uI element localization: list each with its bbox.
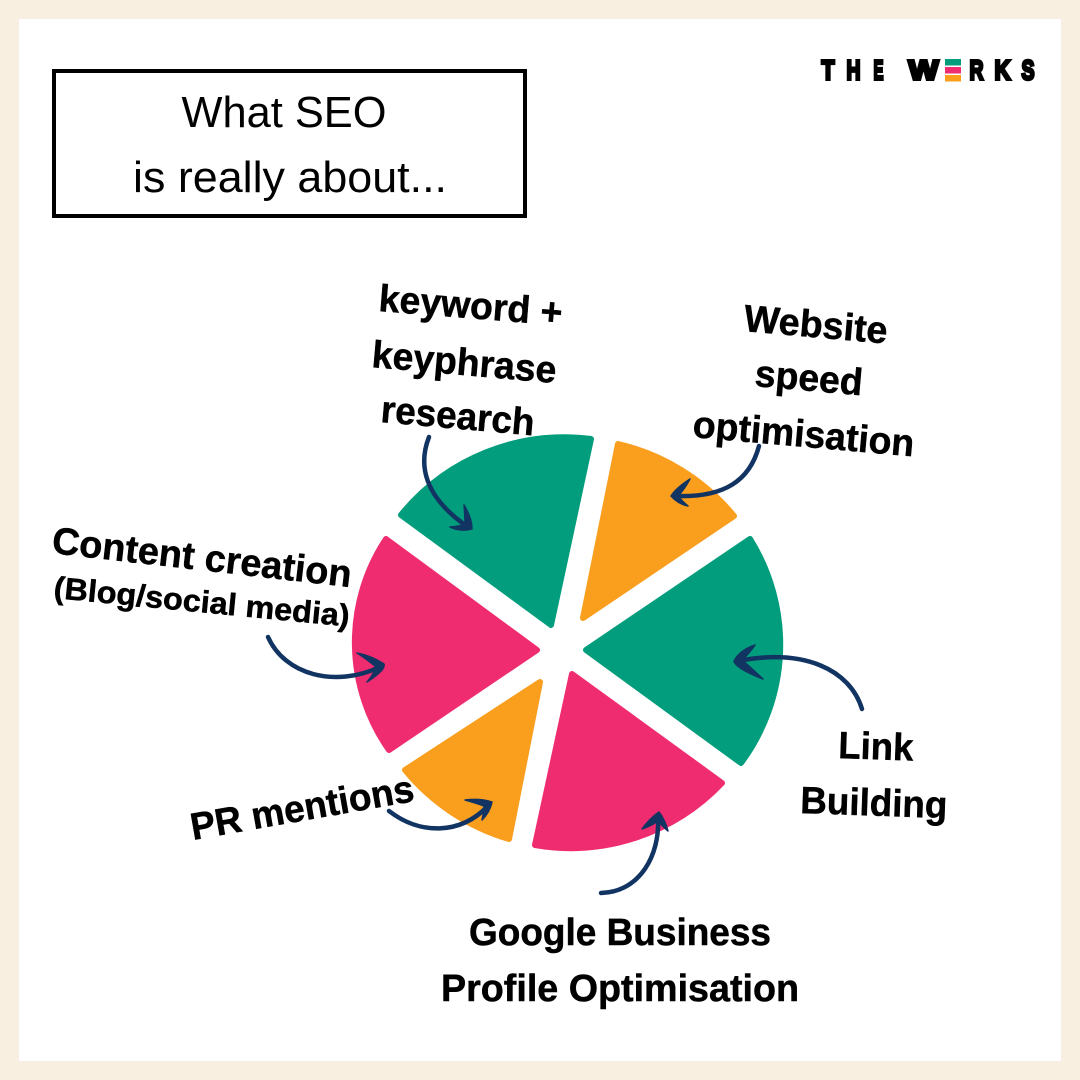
title box: is really about... [133, 153, 447, 202]
label: website speed optimisation: optimisation [691, 404, 916, 465]
slice: Google Business Profile [535, 674, 722, 848]
logo: The Werks: K [994, 54, 1010, 86]
logo: The Werks: E [874, 54, 884, 86]
logo: The Werks: S [1022, 54, 1034, 86]
label: PR mentions: PR mentions [187, 768, 417, 849]
label: website speed optimisation: Website [742, 298, 889, 353]
slice: website speed [583, 444, 734, 618]
slice: PR mentions [405, 682, 540, 839]
logo: The Werks [822, 54, 1034, 86]
arrow: to link building slice [734, 645, 862, 709]
arrow: to keyword slice [424, 437, 472, 530]
label: content creation: Content creation [50, 520, 354, 596]
logo: The Werks: R [970, 54, 984, 86]
label: website speed optimisation [691, 298, 916, 465]
label: Google Business Profile Optimisation: Google Business [469, 912, 771, 954]
slice: keyword research [401, 437, 591, 625]
slice: link building [586, 539, 780, 763]
label: content creation: (Blog/social media) [52, 570, 351, 633]
label: Google Business Profile Optimisation: Profile Optimisation [441, 968, 799, 1010]
label: keyword + keyphrase research: keyword + [377, 278, 564, 334]
label: content creation [50, 520, 354, 633]
label: website speed optimisation: speed [753, 353, 864, 404]
label: link building [800, 725, 948, 827]
logo: The Werks: H [846, 54, 860, 86]
pie chart [355, 437, 780, 848]
arrow: to Google Business slice [601, 812, 668, 893]
label: link building: Link [838, 725, 915, 770]
arrow: to PR slice [389, 799, 492, 828]
arrow: to content slice [268, 637, 384, 682]
arrow: to website speed slice [671, 446, 759, 506]
label: keyword + keyphrase research [370, 278, 564, 444]
logo: The Werks: W [908, 54, 939, 86]
title box: What SEO [182, 88, 386, 137]
slice: content creation [355, 539, 537, 750]
label: link building: Building [800, 780, 948, 827]
logo: The Werks: T [822, 54, 834, 86]
label: keyword + keyphrase research: keyphrase [370, 334, 558, 392]
label: keyword + keyphrase research: research [379, 389, 536, 444]
label: Google Business Profile Optimisation [441, 912, 799, 1010]
title box [54, 71, 525, 216]
